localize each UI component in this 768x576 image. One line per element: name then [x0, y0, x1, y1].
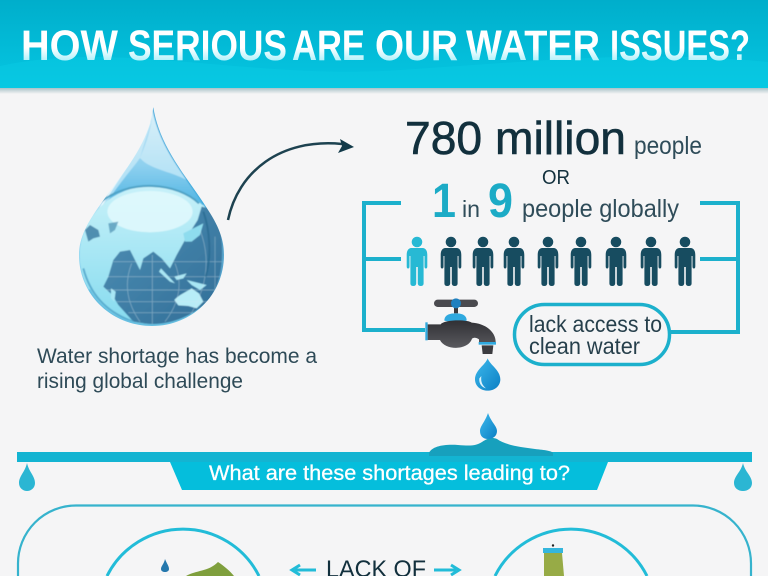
- arrow: left: [292, 565, 316, 575]
- Japan and east Asia coast: [183, 223, 203, 242]
- callout: lack access to clean water: clean water: [529, 333, 640, 359]
- statistic: 1 in 9 people globally: people globally: [522, 195, 679, 223]
- section heading banner: [170, 461, 608, 490]
- ocean: [103, 207, 228, 328]
- panel: lack of resources: [18, 506, 751, 576]
- lower left shade: [83, 268, 133, 322]
- statistic: 1 in 9 people globally: 9: [488, 175, 513, 228]
- Europe dark patch: [85, 225, 100, 242]
- bracket lines: [364, 203, 738, 332]
- curved arrow: [228, 139, 354, 220]
- right drip: [734, 463, 752, 491]
- arrow: right: [434, 565, 459, 575]
- drop body: [79, 110, 206, 290]
- islands: [159, 268, 207, 290]
- grid lines: [106, 230, 223, 325]
- header banner: [0, 0, 768, 94]
- title: [21, 22, 750, 70]
- caption: rising global challenge: Water shortage has become a: [37, 345, 317, 368]
- section heading banner: What are these shortages leading to?: [209, 461, 570, 485]
- right circle: bottle: [495, 529, 647, 576]
- caption: rising global challenge: [37, 345, 317, 393]
- persons remaining: [441, 237, 695, 286]
- globe land base: [80, 186, 204, 320]
- title: SERIOUS: [128, 22, 287, 70]
- caption: rising global challenge: rising global challenge: [37, 370, 243, 393]
- globe: [80, 186, 228, 328]
- left circle: land and water: [107, 529, 259, 576]
- statistic: 1 in 9 people globally: in: [462, 196, 480, 222]
- bottom rim: [88, 290, 217, 326]
- puddle: [429, 438, 553, 456]
- callout: lack access to clean water: lack access to: [529, 311, 662, 337]
- globe top rim: [102, 184, 200, 204]
- right glass rim: [203, 212, 209, 277]
- title: HOW: [21, 22, 118, 70]
- left drip: [19, 463, 35, 491]
- Madagascar: [111, 288, 116, 302]
- statistic: 1 in 9 people globally: [432, 175, 679, 228]
- falling drop: [480, 413, 497, 439]
- text: OR: OR: [542, 167, 570, 189]
- icon: water tap: [425, 298, 500, 391]
- callout: lack access to clean water: [514, 304, 670, 364]
- statistic: 780 million people: people: [634, 132, 702, 160]
- continent highlight: [107, 191, 193, 232]
- title: WATER: [466, 22, 600, 70]
- water drop: [475, 358, 500, 391]
- person highlighted: [407, 237, 427, 286]
- title: ARE: [292, 22, 365, 70]
- statistic: 780 million people: 780 million: [405, 112, 626, 164]
- title: OUR: [375, 22, 458, 70]
- divider shelf with puddle: [17, 413, 752, 491]
- statistic: 1 in 9 people globally: 1: [432, 175, 456, 228]
- continent: Australia: [174, 288, 203, 308]
- people row: 1 in 9: [407, 237, 695, 286]
- icon: water drop with globe: [79, 107, 224, 326]
